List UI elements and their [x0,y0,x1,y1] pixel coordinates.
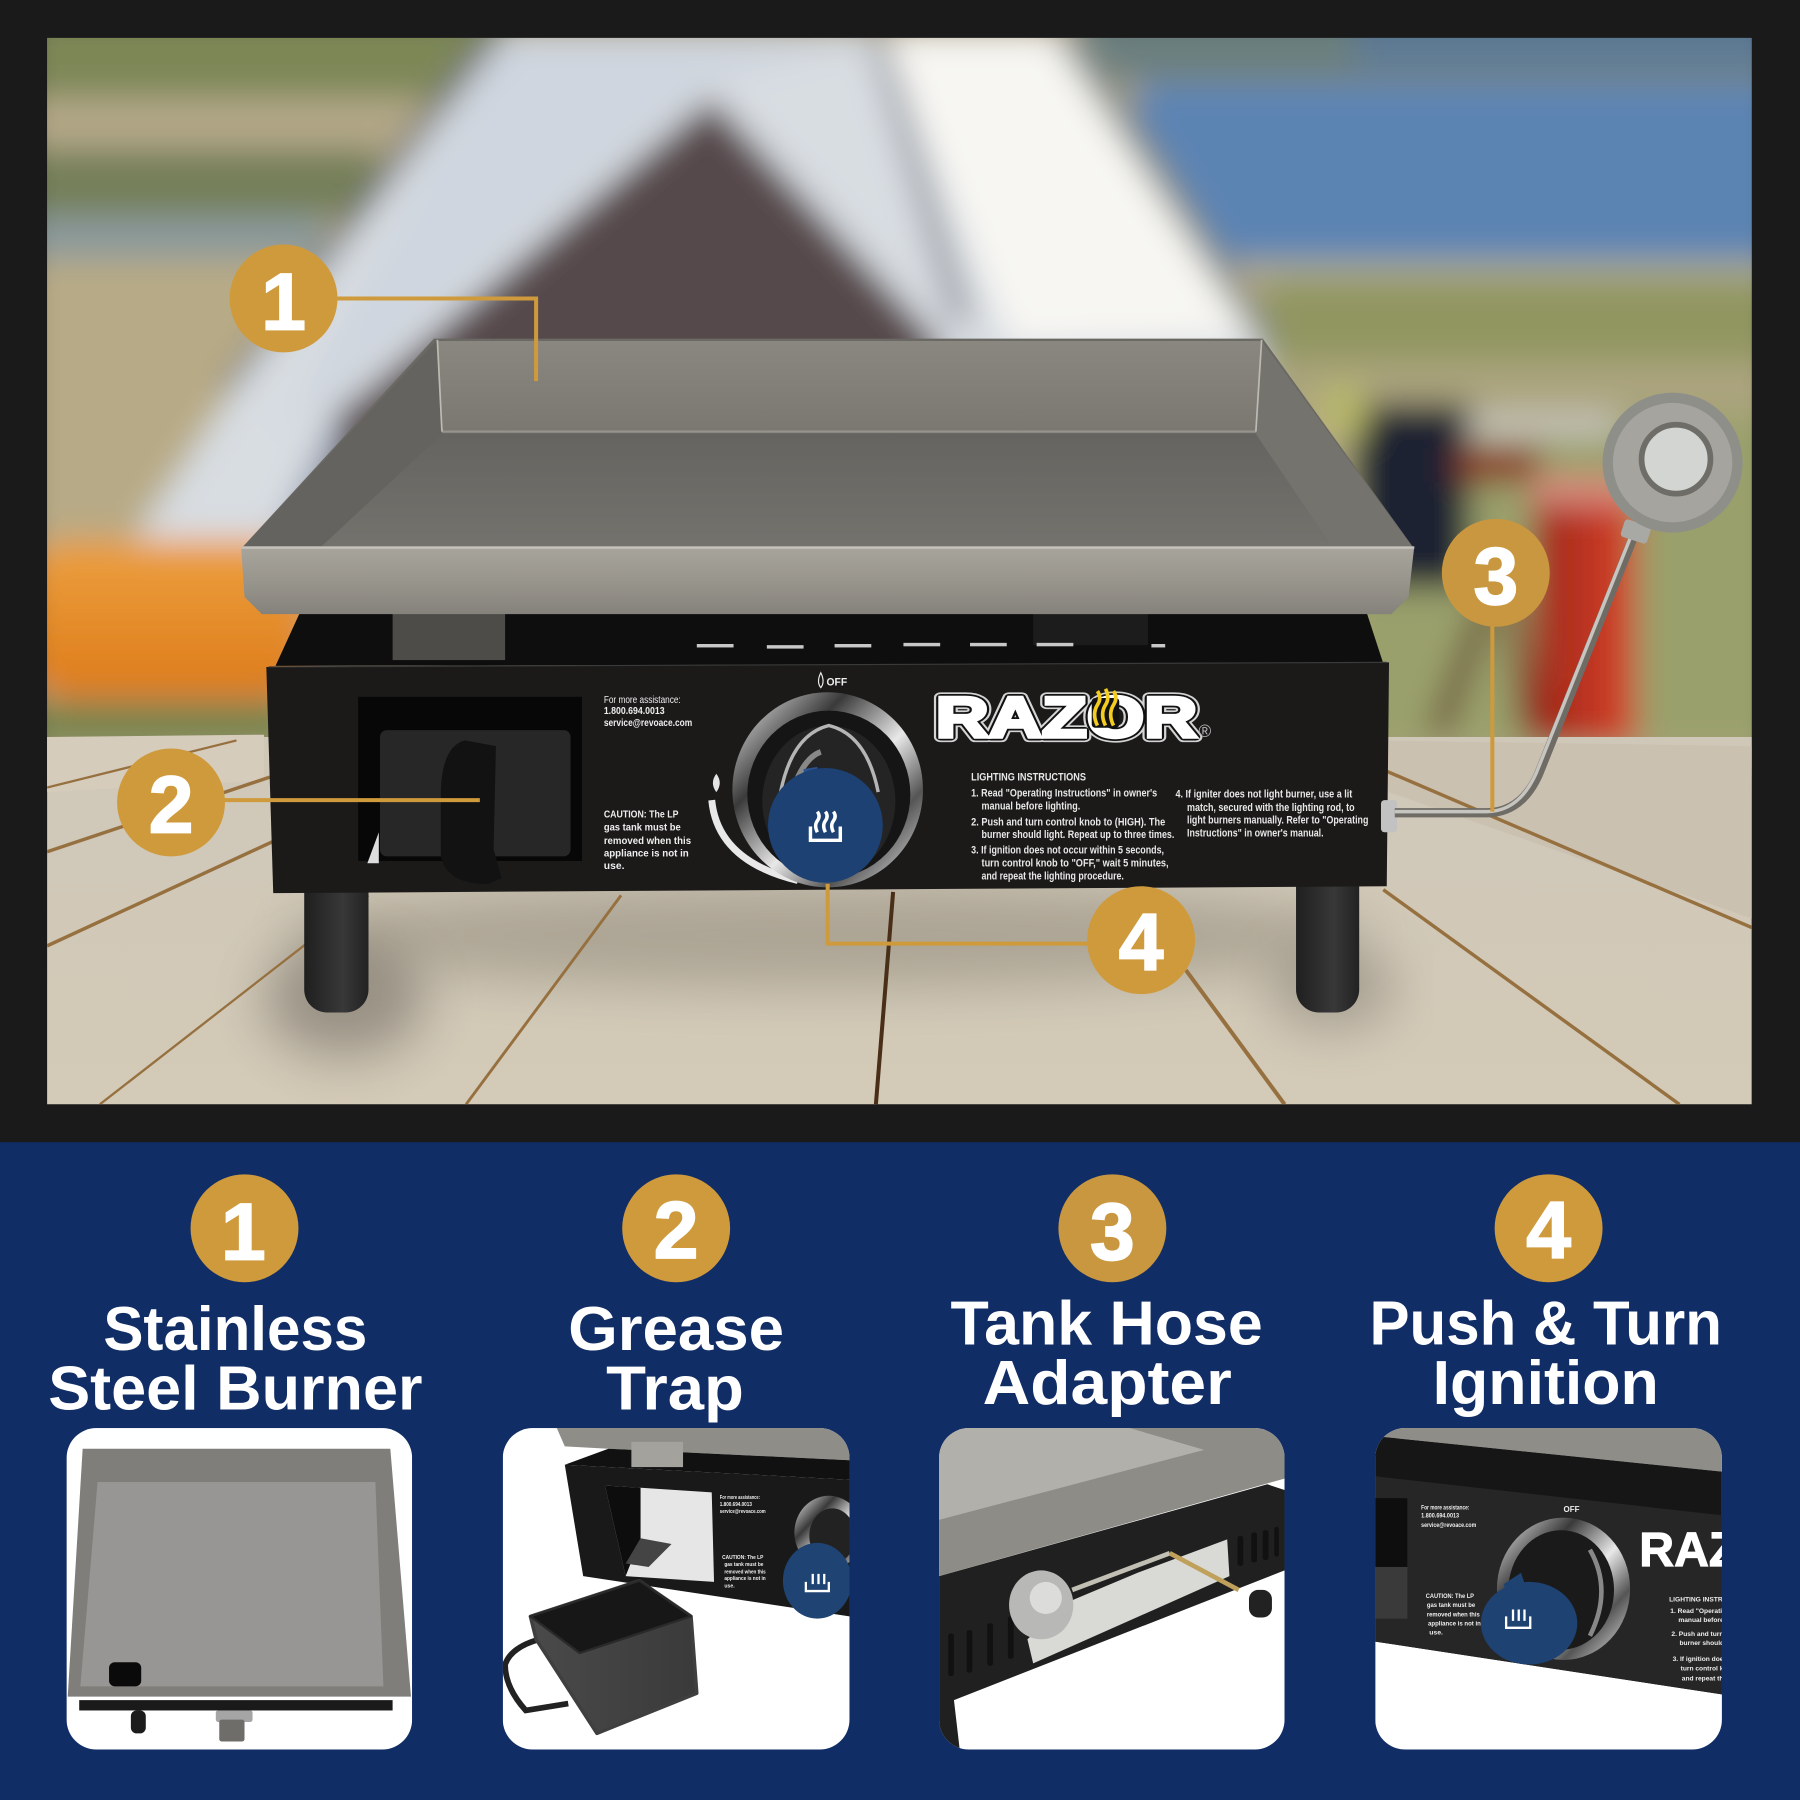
number badge 3: 3 [1090,1187,1135,1277]
product photo card 4: 1. Read "Operati [1670,1608,1722,1615]
product photo card 4: manual before [1678,1617,1724,1624]
product photo card 2: CAUTION: The LP [722,1555,764,1561]
heading 3: Tank Hose [951,1289,1263,1358]
assistance text [604,695,692,729]
product photo card 4: 3. If ignition doe [1673,1656,1724,1663]
Razor logo: RAZOR [936,686,1197,750]
caution text: removed when this [604,836,691,847]
heading 3 [951,1289,1263,1418]
lighting instructions text: LIGHTING INSTRUCTIONS [971,772,1086,784]
off label: OFF [827,676,847,688]
lighting instructions text: turn control knob to "OFF," wait 5 minutes, [982,858,1169,870]
lighting instructions text: and repeat the lighting procedure. [982,870,1124,882]
lighting instructions text: match, secured with the lighting rod, to [1187,802,1355,814]
wooden table planks [47,735,1752,1104]
heading 4: Push & Turn [1370,1289,1722,1358]
lighting instructions text: light burners manually. Refer to "Operating [1187,815,1368,827]
lighting instructions text: 1. Read "Operating Instructions" in owner's [971,788,1157,800]
heading 2: Grease [568,1295,784,1364]
product photo card 4: removed when this [1427,1611,1480,1618]
griddle legs [304,886,1360,1012]
Razor logo: RAZOR [936,686,1197,750]
badge 4 on photo [1087,886,1195,994]
knob with chrome ring and blue tag [712,692,923,887]
griddle cooktop pan [241,339,1414,614]
feature 2: grease trap [503,1174,863,1749]
lighting instructions text: 2. Push and turn control knob to (HIGH). The [971,816,1165,828]
heading 1: Stainless [103,1295,367,1364]
product photo card 4: turn control kn [1681,1665,1727,1672]
badge 2 on photo: 2 [149,760,193,850]
badge 1 on photo [230,245,338,352]
caution text: appliance is not in [604,848,689,859]
gas hose and regulator [1381,393,1743,832]
product photo card 4: OFF [1564,1505,1580,1514]
caution text [604,809,691,872]
heading 4: Ignition [1433,1349,1659,1418]
caution text: gas tank must be [604,823,681,834]
off label [818,673,847,688]
caution text: CAUTION: The LP [604,809,679,820]
product photo card 4: appliance is not in [1428,1621,1481,1628]
Razor logo: ® [1198,721,1211,741]
assistance text: 1.800.694.0013 [604,706,665,717]
number badge 1: 1 [221,1187,266,1277]
product photo card 4: use. [1429,1630,1443,1637]
product photo card 4: For more assistance: [1421,1505,1469,1512]
lighting instructions text: 4. If igniter does not light burner, use a lit [1176,788,1353,800]
product photo card 4: CAUTION: The LP [1426,1593,1474,1600]
product photo card 4: service@revoace.com [1421,1522,1476,1529]
number badge 4 [1495,1174,1603,1282]
badge 4 on photo: 4 [1119,898,1164,988]
product photo card 2: service@revoace.com [720,1509,766,1515]
hero photo: griddle on camp table [23,11,1779,1104]
grease trap opening and cup [358,697,582,884]
product photo card 4 [1375,1428,1738,1749]
product photo card 4: gas tank must be [1427,1602,1475,1609]
badge 1 on photo: 1 [261,257,306,347]
heading 1: Steel Burner [48,1355,422,1424]
assistance text: For more assistance: [604,695,681,706]
leader line 1 [333,298,536,381]
product photo card 4: LIGHTING INSTR [1669,1596,1723,1603]
number badge 4: 4 [1526,1186,1571,1276]
number badge 1 [191,1174,298,1282]
heading 1 [48,1295,422,1424]
product photo card 2: For more assistance: [720,1495,760,1501]
product photo card 2: removed when this [724,1569,766,1575]
number badge 2 [622,1174,730,1282]
product photo card 2 [503,1428,863,1749]
product photo card 4: burner should [1679,1640,1724,1647]
product photo card 4: RAZ [1639,1523,1738,1577]
badge 3 on photo [1442,519,1550,627]
product photo card 1 [67,1428,412,1749]
heading 3: Adapter [983,1349,1232,1418]
lighting instructions text: burner should light. Repeat up to three times. [982,829,1174,841]
heading 2: Trap [606,1355,744,1424]
Razor logo [934,688,1211,743]
griddle black body [266,662,1389,893]
lighting instructions text [971,772,1368,882]
feature 4: push and turn ignition [1370,1174,1738,1749]
number badge 3 [1058,1174,1166,1282]
feature 1: stainless steel burner [48,1174,422,1749]
badge 3 on photo: 3 [1473,532,1518,622]
griddle burner box under the pan [276,608,1383,666]
lighting instructions text: Instructions" in owner's manual. [1187,827,1324,839]
heading 4 [1370,1289,1722,1418]
leader line 3 [1491,620,1494,812]
number badge 2: 2 [654,1186,698,1276]
navy features panel [0,1142,1800,1800]
caution text: use. [604,861,625,872]
Razor logo: RAZOR [936,686,1197,750]
heading 2 [568,1295,784,1424]
leader line 4 [828,884,1091,944]
product photo card 4: and repeat th [1682,1676,1723,1683]
product photo card 2: appliance is not in [724,1576,766,1582]
leader line 2 [218,798,480,802]
badge 2 on photo [117,748,225,856]
product photo card 2: use. [724,1584,735,1590]
blurred campsite backdrop [23,11,1779,769]
assistance text: service@revoace.com [604,718,692,729]
product photo card 4: 1.800.694.0013 [1421,1513,1459,1520]
product photo card 4: 2. Push and turn [1671,1631,1723,1638]
product photo card 3 [939,1428,1285,1749]
product photo card 2: gas tank must be [724,1562,763,1568]
lighting instructions text: 3. If ignition does not occur within 5 seconds, [971,845,1164,857]
feature 3: tank hose adapter [939,1174,1285,1749]
product photo card 2: 1.800.694.0013 [720,1502,752,1508]
lighting instructions text: manual before lighting. [982,800,1080,812]
